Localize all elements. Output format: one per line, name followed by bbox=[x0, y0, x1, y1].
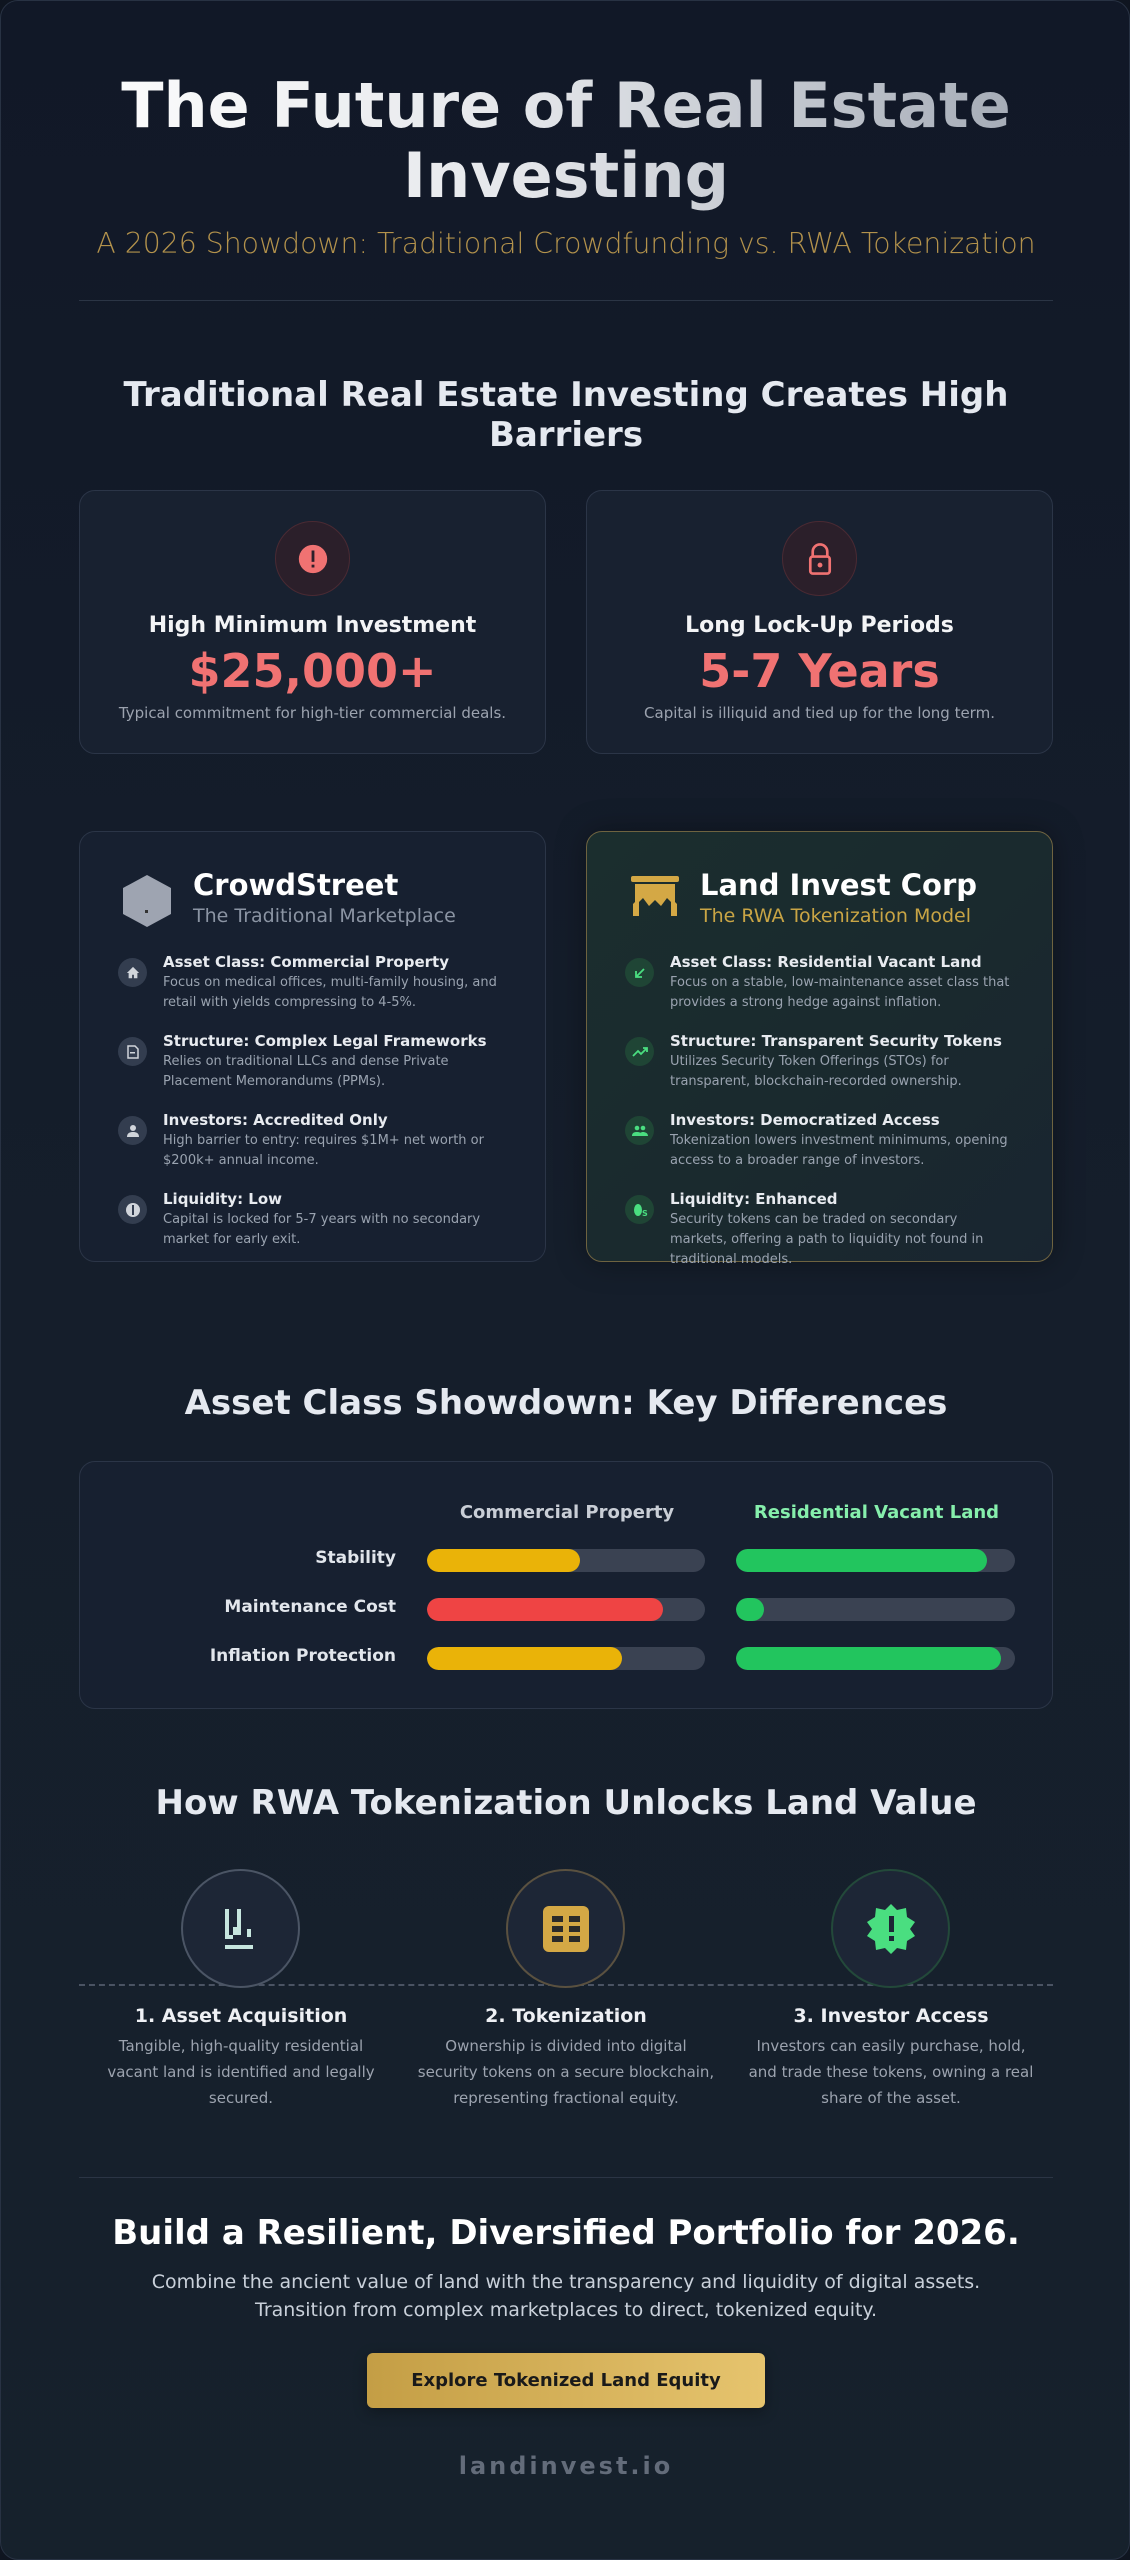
panel: high minimum investment bbox=[79, 490, 546, 754]
panel: CrowdStreet: Investors: Accredited Only bbox=[163, 1111, 388, 1129]
item: investors democratized bbox=[625, 1111, 1008, 1168]
icon: gold logo bbox=[631, 876, 679, 916]
panel: CrowdStreet: Asset Class: Commercial Property bbox=[163, 953, 449, 971]
panel: Land Invest Corp: markets, offering a path to liquidity not found in traditional models. bbox=[670, 1232, 983, 1267]
item: structure tokens bbox=[625, 1032, 1002, 1089]
panel: CrowdStreet: High barrier to entry: requires $1M+ net worth or $200k+ annual income. bbox=[163, 1133, 484, 1168]
title: The Future of Real Estate bbox=[121, 69, 1011, 142]
icon: alert bbox=[275, 521, 350, 596]
panel: Land Invest Corp: Focus on a stable, low-maintenance asset class that provides a strong hedge against inflation. bbox=[670, 975, 1009, 1010]
panel: Land Invest Corp: transparent, blockchain-recorded ownership. bbox=[670, 1074, 962, 1089]
item: liquidity bbox=[118, 1190, 480, 1247]
title: Investing bbox=[403, 139, 729, 212]
CTA paragraph bbox=[152, 2271, 980, 2321]
item: asset class land bbox=[625, 953, 1010, 1010]
CTA heading: Build a Resilient, Diversified Portfolio for 2026. bbox=[112, 2213, 1020, 2253]
subtitle: A 2026 Showdown: Traditional Crowdfunding vs. RWA Tokenization bbox=[96, 227, 1036, 260]
bar chart panel: Commercial Property bbox=[460, 1502, 674, 1523]
icon: step 1 bbox=[181, 1869, 300, 1988]
icon: step 3 bbox=[831, 1869, 950, 1988]
panel: CrowdStreet: Capital is locked for 5-7 years with no secondary market for early exit. bbox=[163, 1212, 480, 1247]
panel: Land Invest Corp: S bbox=[642, 1208, 648, 1218]
panel: long lock-up: 5-7 Years bbox=[699, 644, 940, 698]
step 1 text: Tangible, high-quality residential vacant land is identified and legally secured. bbox=[107, 2037, 375, 2107]
icon: lock bbox=[782, 521, 857, 596]
panel: Land Invest Corp: Investors: Democratized Access bbox=[670, 1111, 940, 1129]
panel: Land Invest Corp: The RWA Tokenization Model bbox=[700, 905, 971, 927]
step 3 text: Investors can easily purchase, hold, and trade these tokens, owning a real share of the asset. bbox=[749, 2037, 1033, 2107]
panel: Land Invest Corp: Liquidity: Enhanced bbox=[670, 1190, 838, 1208]
panel: CrowdStreet: Liquidity: Low bbox=[163, 1190, 282, 1208]
panel: high minimum investment: Typical commitment for high-tier commercial deals. bbox=[119, 704, 506, 722]
panel: long lock-up: Long Lock-Up Periods bbox=[685, 613, 954, 638]
panel: long lock-up bbox=[586, 490, 1053, 754]
icon: step 2 bbox=[506, 1869, 625, 1988]
bar chart rows: Stability bbox=[315, 1548, 396, 1568]
CTA paragraph: Transition from complex marketplaces to direct, tokenized equity. bbox=[255, 2299, 877, 2321]
panel: Land Invest Corp: Asset Class: Residential Vacant Land bbox=[670, 953, 982, 971]
title bbox=[41, 71, 1091, 211]
heading: asset class showdown: Asset Class Showdown: Key Differences bbox=[185, 1383, 947, 1423]
step 3 text: 3. Investor Access bbox=[793, 2005, 989, 2027]
CTA button bbox=[367, 2353, 765, 2408]
bar chart rows: Maintenance Cost bbox=[224, 1597, 396, 1617]
icon: hexagon logo bbox=[123, 875, 171, 927]
bar chart panel bbox=[79, 1461, 1053, 1709]
step 1 text bbox=[107, 2005, 375, 2107]
footer: landinvest.io bbox=[459, 2452, 673, 2480]
CTA paragraph: Combine the ancient value of land with the transparency and liquidity of digital assets. bbox=[152, 2271, 980, 2293]
panel: CrowdStreet bbox=[79, 831, 546, 1262]
heading: tokenization steps: How RWA Tokenization Unlocks Land Value bbox=[155, 1783, 977, 1823]
panel: Land Invest Corp bbox=[586, 831, 1053, 1262]
panel: Land Invest Corp: Security tokens can be traded on secondary bbox=[670, 1212, 957, 1227]
step 2 text bbox=[418, 2005, 714, 2107]
step 2 text: Ownership is divided into digital security tokens on a secure blockchain, representing fractional equity. bbox=[418, 2037, 714, 2107]
panel: CrowdStreet: Relies on traditional LLCs and dense Private Placement Memorandums (PPMs). bbox=[163, 1054, 449, 1089]
panel: Land Invest Corp: Tokenization lowers investment minimums, opening access to a broader range of investors. bbox=[670, 1133, 1008, 1168]
panel: CrowdStreet: Structure: Complex Legal Frameworks bbox=[163, 1032, 487, 1050]
panel: long lock-up: Capital is illiquid and tied up for the long term. bbox=[644, 704, 995, 722]
bar chart panel: Residential Vacant Land bbox=[754, 1502, 999, 1523]
bar chart rows: Inflation Protection bbox=[210, 1646, 396, 1666]
item: investors bbox=[118, 1111, 484, 1168]
step 3 text bbox=[749, 2005, 1033, 2107]
item: structure bbox=[118, 1032, 487, 1089]
item: liquidity enhanced bbox=[625, 1190, 983, 1267]
panel: Land Invest Corp: Land Invest Corp bbox=[700, 868, 977, 902]
step 1 text: 1. Asset Acquisition bbox=[135, 2005, 347, 2027]
panel: high minimum investment: High Minimum Investment bbox=[149, 613, 476, 638]
heading: barriers: Traditional Real Estate Investing Creates High Barriers bbox=[124, 375, 1008, 455]
item: asset class bbox=[118, 953, 497, 1010]
panel: CrowdStreet: CrowdStreet bbox=[193, 868, 398, 902]
panel: high minimum investment: $25,000+ bbox=[188, 644, 437, 698]
bar chart rows bbox=[210, 1548, 1015, 1670]
panel: Land Invest Corp: Utilizes Security Token Offerings (STOs) for bbox=[670, 1054, 949, 1069]
panel: CrowdStreet: The Traditional Marketplace bbox=[193, 905, 456, 927]
panel: CrowdStreet: Focus on medical offices, multi-family housing, and retail with yields compressing to 4-5%. bbox=[163, 975, 497, 1010]
panel: Land Invest Corp: Structure: Transparent Security Tokens bbox=[670, 1032, 1002, 1050]
CTA button: Explore Tokenized Land Equity bbox=[411, 2370, 721, 2391]
step 2 text: 2. Tokenization bbox=[485, 2005, 647, 2027]
